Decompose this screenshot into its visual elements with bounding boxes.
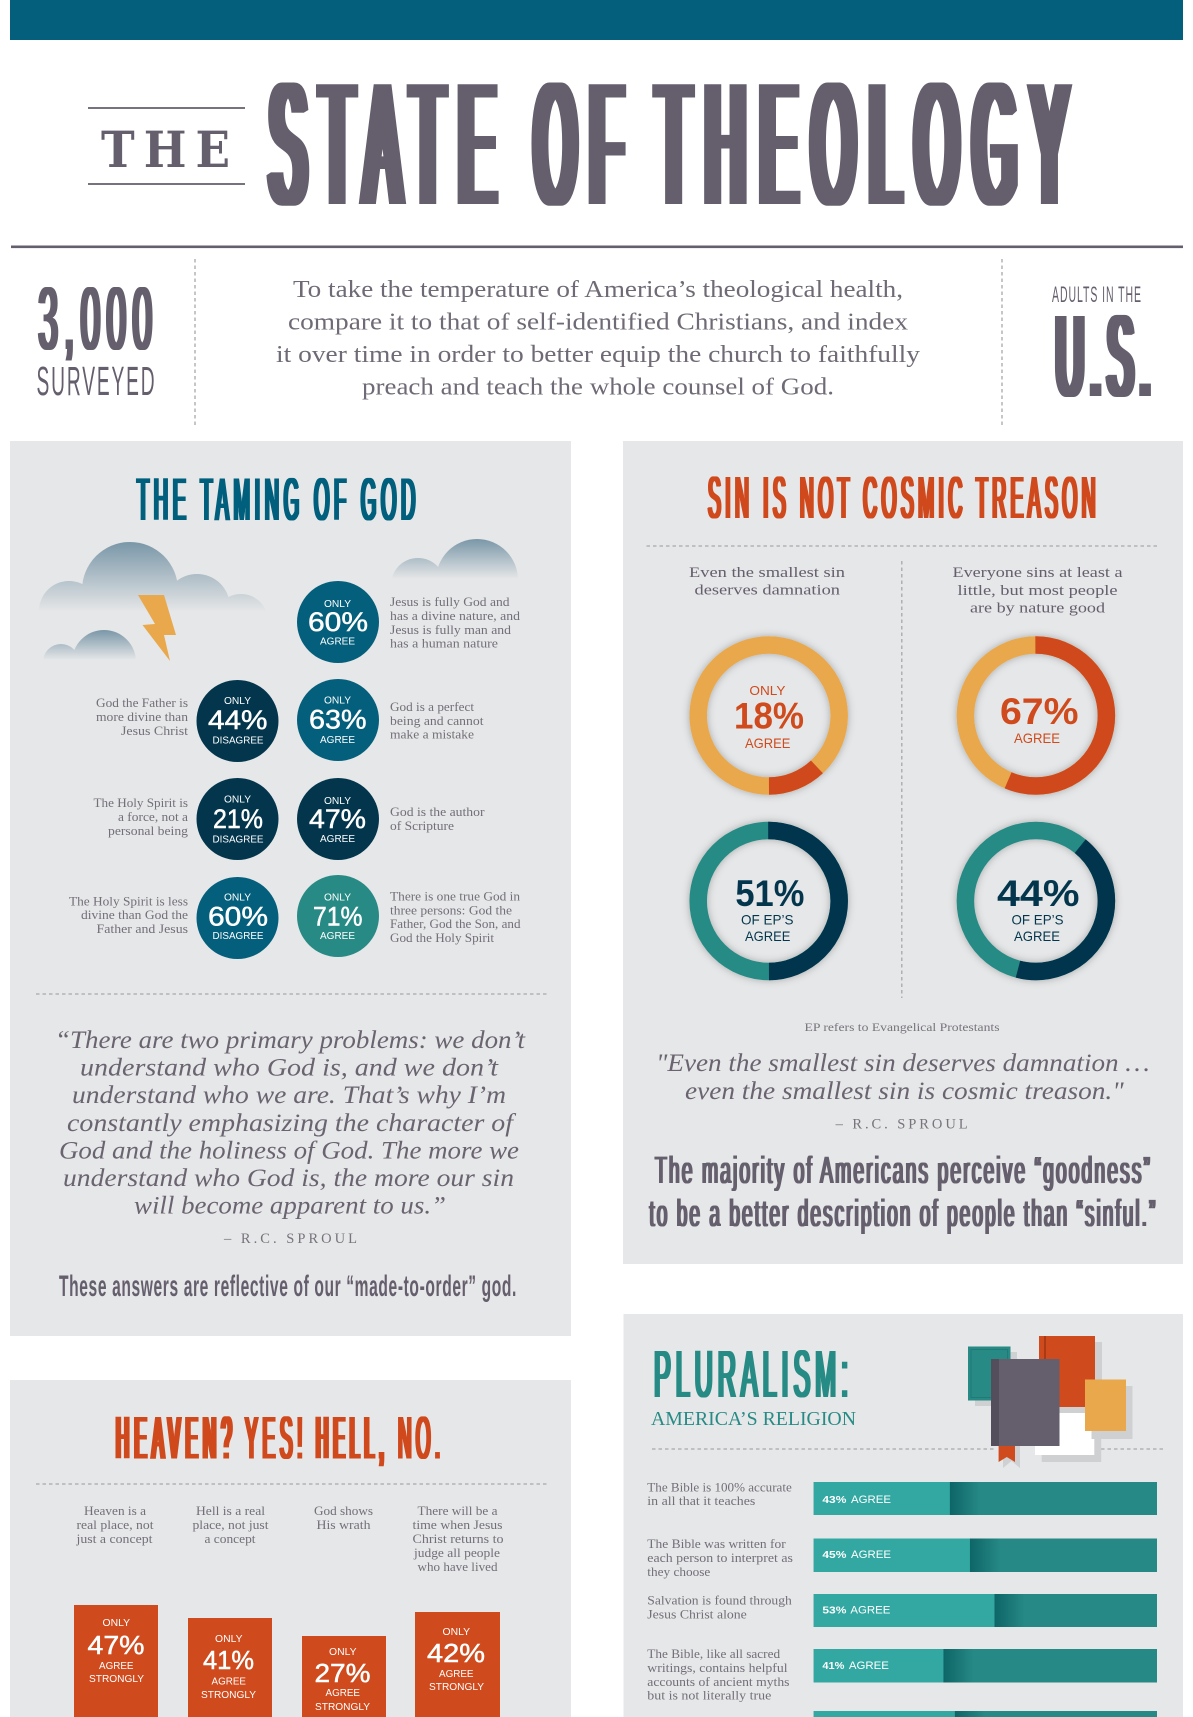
stat circle: 60% agree, Jesus: Jesus is fully man and: [390, 623, 512, 637]
stat circle: 47% agree: of Scripture: [390, 819, 454, 833]
stat circle: 44% disagree: 44%: [208, 705, 268, 735]
bar: 42%: ONLY: [442, 1627, 470, 1638]
donut: 51% of EP's agree: [698, 830, 839, 972]
donut: 67% agree: AGREE: [1014, 730, 1060, 746]
icon: stack of books: [968, 1336, 1132, 1468]
stat circle: 47% agree: ONLY: [324, 796, 351, 807]
intro paragraph: [276, 276, 921, 400]
column heading: right: little, but most people: [958, 583, 1118, 599]
stat circle: 71% agree: three persons: God the: [390, 904, 512, 918]
stat circle: 60% disagree: DISAGREE: [212, 930, 264, 942]
bar: 47%: STRONGLY: [89, 1674, 144, 1685]
bar: 27%: AGREE: [326, 1688, 360, 1699]
icon: storm clouds and lightning: [40, 539, 518, 661]
quote: Sproul on knowing God: constantly emphasizing the character of: [67, 1110, 516, 1137]
heading: heaven yes hell no: HELL,: [316, 1404, 389, 1472]
stat circle: 63% agree: 63%: [309, 704, 366, 734]
bar label: wrath: His wrath: [316, 1518, 371, 1532]
donut: 44% of EP's agree: [965, 830, 1106, 972]
stat circle: 21% disagree: 21%: [213, 804, 263, 834]
row: sacred writings, 41%: but is not literally true: [647, 1688, 772, 1702]
stat circle: 71% agree: 71%: [313, 902, 362, 932]
panel: pluralism: [624, 1314, 1183, 1717]
bar: 41%: [188, 1618, 272, 1717]
text: 3,000: [38, 268, 158, 368]
bar label: judgment: judge all people: [413, 1546, 500, 1560]
quote: Sproul on knowing God: understand who God is, the more our sin: [63, 1165, 514, 1192]
bar: 27%: ONLY: [329, 1647, 357, 1658]
stat circle: 63% agree: [297, 679, 484, 761]
stat circle: 63% agree: ONLY: [324, 696, 351, 706]
column heading: left: deserves damnation: [694, 582, 841, 598]
quote: Sproul on knowing God: “There are two primary problems: we don’t: [55, 1027, 526, 1054]
stat circle: 47% agree: 47%: [309, 804, 366, 834]
stat: 3,000 surveyed: [36, 268, 158, 404]
donut: 67% agree: [965, 645, 1106, 786]
bar label: hell: a concept: [204, 1532, 256, 1546]
row: 100% accurate, 43%: The Bible is 100% accurate: [647, 1480, 792, 1494]
bar: 41%: STRONGLY: [201, 1690, 256, 1701]
stat circle: 47% agree: [297, 778, 485, 860]
panel: pluralism: PLURALISM:: [654, 1337, 853, 1412]
bar label: heaven: Heaven is a: [84, 1504, 146, 1518]
stat circle: 60% agree, Jesus: ONLY: [324, 599, 351, 610]
row: sacred writings, 41%: AGREE: [849, 1660, 889, 1672]
quote: Sproul on knowing God: will become apparent to us.”: [134, 1192, 446, 1220]
bar label: judgment: Christ returns to: [412, 1532, 504, 1546]
attribution: – R.C. SPROUL: [835, 1116, 968, 1132]
intro paragraph: compare it to that of self-identified Christians, and index: [288, 308, 908, 336]
stat circle: 71% agree: AGREE: [320, 930, 355, 942]
row: interpret, 45%: they choose: [647, 1565, 711, 1579]
row: sacred writings, 41%: accounts of ancient myths: [647, 1675, 790, 1689]
stat circle: 60% agree, Jesus: AGREE: [320, 636, 355, 648]
stat circle: 60% agree, Jesus: [297, 581, 521, 663]
heading: heaven yes hell no: HEAVEN?: [116, 1404, 237, 1472]
stat circle: 60% disagree: ONLY: [224, 892, 251, 904]
row: 100% accurate, 43%: 43%: [822, 1494, 847, 1506]
bar: 47%: [74, 1605, 158, 1717]
stat circle: 60% agree, Jesus: has a human nature: [390, 636, 498, 650]
footnote: EP refers to Evangelical Protestants: [804, 1022, 1000, 1034]
subheading: AMERICA’S RELIGION: [651, 1408, 856, 1430]
stat circle: 71% agree: ONLY: [324, 892, 351, 904]
donut: 51% of EP's agree: AGREE: [745, 928, 790, 944]
bar label: heaven: real place, not: [76, 1518, 154, 1532]
stat circle: 60% disagree: 60%: [208, 902, 268, 932]
stat circle: 71% agree: God the Holy Spirit: [390, 931, 495, 945]
row: 100% accurate, 43%: AGREE: [851, 1494, 891, 1506]
column heading: left: Even the smallest sin: [689, 565, 846, 581]
bar: 47%: ONLY: [102, 1618, 130, 1629]
stat circle: 47% agree: God is the author: [390, 805, 485, 819]
row: sacred writings, 41%: [647, 1647, 1157, 1702]
intro paragraph: preach and teach the whole counsel of God.: [362, 374, 834, 400]
stat circle: 44% disagree: more divine than: [96, 710, 189, 724]
donut: 18% agree: ONLY: [749, 683, 786, 698]
column heading: right: Everyone sins at least a: [952, 565, 1123, 581]
row: salvation, 53%: Salvation is found through: [647, 1594, 793, 1608]
column heading: right: [952, 565, 1123, 616]
donut: 67% agree: 67%: [1000, 691, 1078, 732]
donut: 18% agree: 18%: [734, 696, 804, 736]
panel: sin is not cosmic treason: [623, 441, 1183, 1264]
bar label: hell: place, not just: [192, 1518, 269, 1532]
row: 100% accurate, 43%: [647, 1480, 1157, 1515]
stat circle: 63% agree: AGREE: [320, 734, 355, 746]
row: interpret, 45%: [647, 1537, 1157, 1579]
stat circle: 60% disagree: Father and Jesus: [96, 922, 188, 936]
stat circle: 21% disagree: ONLY: [224, 794, 251, 806]
row: sacred writings, 41%: The Bible, like all sacred: [647, 1647, 781, 1661]
bar label: heaven: just a concept: [75, 1532, 153, 1546]
bar label: judgment: time when Jesus: [412, 1518, 503, 1532]
row: interpret, 45%: AGREE: [851, 1549, 891, 1561]
stat circle: 44% disagree: God the Father is: [96, 696, 188, 710]
bar: 41%: 41%: [203, 1645, 254, 1675]
row: salvation, 53%: Jesus Christ alone: [647, 1608, 747, 1622]
bar label: judgment: [412, 1504, 504, 1574]
bar: 47%: AGREE: [99, 1661, 134, 1672]
donut: 51% of EP's agree: 51%: [735, 873, 804, 914]
attribution: – R.C. SPROUL: [223, 1231, 357, 1247]
bar: 42%: STRONGLY: [429, 1682, 484, 1693]
intro paragraph: it over time in order to better equip the church to faithfully: [276, 341, 921, 368]
stat circle: 71% agree: There is one true God in: [390, 890, 521, 904]
quote: Sproul on knowing God: [55, 1027, 526, 1220]
row: 100% accurate, 43%: in all that it teaches: [647, 1494, 755, 1508]
bar: 42%: 42%: [427, 1638, 485, 1668]
stat circle: 44% disagree: Jesus Christ: [121, 724, 189, 738]
quote: cosmic treason: even the smallest sin is cosmic treason.": [685, 1078, 1124, 1105]
bar: 27%: [302, 1636, 386, 1717]
top bar: [10, 0, 1183, 40]
row: sacred writings, 41%: writings, contains helpful: [647, 1661, 788, 1675]
title: [88, 46, 1083, 241]
panel: the taming of God: THE TAMING OF GOD: [137, 466, 420, 533]
stat circle: 47% agree: AGREE: [320, 833, 355, 845]
stat circle: 63% agree: make a mistake: [390, 728, 474, 742]
column heading: right: are by nature good: [970, 600, 1106, 616]
row: sacred writings, 41%: 41%: [822, 1660, 845, 1672]
row: salvation, 53%: [647, 1594, 1157, 1627]
stat circle: 21% disagree: [94, 778, 278, 860]
stat circle: 71% agree: [297, 875, 521, 957]
stat circle: 21% disagree: DISAGREE: [212, 834, 264, 846]
bar: 47%: 47%: [88, 1630, 144, 1660]
stat circle: 44% disagree: ONLY: [224, 696, 251, 707]
row: interpret, 45%: The Bible was written for: [647, 1537, 787, 1551]
stat circle: 21% disagree: a force, not a: [118, 810, 188, 824]
donut: 18% agree: AGREE: [745, 735, 790, 751]
stat: adults in the U.S.: [1052, 282, 1157, 421]
takeaway: These answers are reflective of our “made-to-order” god.: [59, 1270, 517, 1303]
bar: 42%: AGREE: [439, 1669, 474, 1680]
donut: 18% agree: [698, 645, 839, 786]
quote: cosmic treason: [656, 1050, 1150, 1105]
takeaway: [649, 1150, 1157, 1235]
bar label: hell: [192, 1504, 269, 1546]
stat circle: 71% agree: Father, God the Son, and: [390, 917, 521, 931]
STATE OF THEOLOGY: STATE: [270, 46, 510, 241]
stat circle: 60% disagree: [69, 877, 278, 959]
row: next bar, cut off: [814, 1711, 1157, 1717]
stat circle: 60% disagree: The Holy Spirit is less: [69, 894, 188, 908]
bar: 27%: STRONGLY: [315, 1702, 370, 1713]
title rule lines and THE: THE: [101, 120, 239, 179]
quote: Sproul on knowing God: God and the holiness of God. The more we: [59, 1138, 519, 1164]
panel: heaven yes hell no: NO.: [398, 1404, 444, 1472]
quote: Sproul on knowing God: understand who God is, and we don’t: [80, 1054, 499, 1082]
panel: heaven yes hell no: [10, 1380, 571, 1717]
bar: 41%: AGREE: [212, 1676, 246, 1688]
header rule: [11, 246, 1183, 248]
donut: 44% of EP's agree: OF EP’S: [1012, 912, 1064, 928]
bar label: wrath: [314, 1504, 373, 1532]
bar label: judgment: who have lived: [418, 1560, 498, 1574]
quote: Sproul on knowing God: understand who we are. That’s why I’m: [72, 1082, 506, 1109]
stat circle: 44% disagree: DISAGREE: [212, 734, 264, 746]
bar label: wrath: God shows: [314, 1504, 373, 1518]
panel: the taming of God: [10, 441, 571, 1336]
donut: 44% of EP's agree: AGREE: [1014, 928, 1060, 944]
donut: 44% of EP's agree: 44%: [997, 873, 1080, 914]
donut: 51% of EP's agree: OF EP’S: [741, 912, 794, 928]
row: interpret, 45%: 45%: [822, 1549, 847, 1561]
bar: 42%: [415, 1612, 500, 1717]
bar label: judgment: There will be a: [418, 1504, 498, 1518]
STATE OF THEOLOGY: OF: [535, 46, 637, 241]
stat circle: 60% agree, Jesus: Jesus is fully God and: [390, 595, 510, 609]
bar: 27%: 27%: [314, 1658, 370, 1688]
stat circle: 60% agree, Jesus: 60%: [308, 607, 368, 637]
bar label: hell: Hell is a real: [196, 1504, 266, 1518]
heading: heaven yes hell no: YES!: [245, 1404, 307, 1472]
bar label: heaven: [75, 1504, 154, 1546]
row: salvation, 53%: 53%: [822, 1604, 847, 1616]
intro paragraph: To take the temperature of America’s theological health,: [293, 276, 903, 303]
stat circle: 21% disagree: The Holy Spirit is: [94, 796, 188, 810]
quote: cosmic treason: "Even the smallest sin deserves damnation …: [656, 1050, 1150, 1077]
stat circle: 44% disagree: [96, 680, 278, 762]
stat circle: 21% disagree: personal being: [108, 824, 189, 838]
text: SURVEYED: [36, 358, 156, 404]
stat circle: 60% disagree: divine than God the: [81, 908, 188, 922]
column heading: left: [689, 565, 846, 598]
stat circle: 63% agree: being and cannot: [390, 714, 484, 728]
stat circle: 60% agree, Jesus: has a divine nature, and: [390, 609, 521, 623]
row: interpret, 45%: each person to interpret as: [647, 1551, 793, 1565]
row: salvation, 53%: AGREE: [850, 1604, 890, 1616]
stat circle: 63% agree: God is a perfect: [390, 700, 475, 714]
bar: 41%: ONLY: [215, 1634, 243, 1645]
